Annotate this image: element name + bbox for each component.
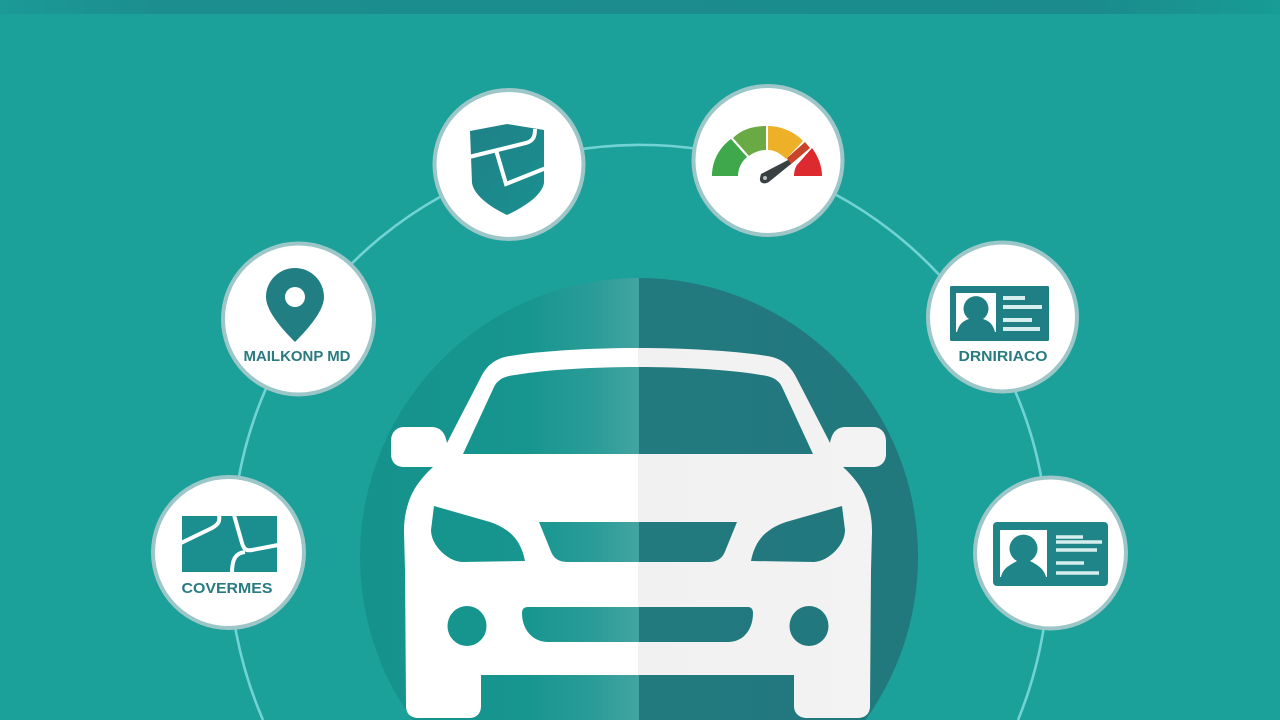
label: COVERMES: [182, 580, 272, 597]
node: coverage shield: [434, 90, 584, 239]
icon: road map: [181, 515, 278, 573]
node: ID card: [975, 478, 1126, 628]
node: driver ID card: [928, 242, 1077, 392]
icon: map pin: [266, 268, 324, 342]
needle: [760, 160, 791, 183]
icon: ID card: [993, 522, 1108, 586]
icon: ID card: [950, 286, 1049, 341]
central disc: [360, 278, 918, 720]
label: DRNIRIACO: [958, 349, 1048, 365]
car front view: [391, 348, 886, 718]
connecting ring: [235, 145, 1044, 720]
node: coverage map: [153, 477, 304, 628]
icon: shield: [469, 124, 546, 215]
top band: [0, 0, 1280, 14]
icon: gauge: [712, 126, 822, 183]
node: location pin: [223, 244, 374, 394]
node: speed gauge: [694, 86, 842, 235]
label: MAILKONP MD: [244, 349, 350, 365]
